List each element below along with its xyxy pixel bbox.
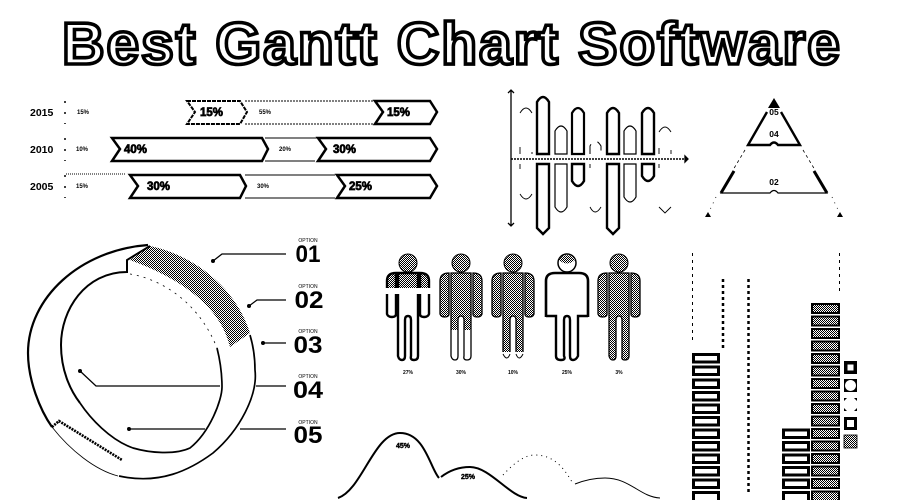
lower columns <box>520 164 671 234</box>
chart: people pictograms <box>384 254 640 376</box>
person percentages: 10% <box>508 370 519 376</box>
option 02: 02 <box>294 287 324 314</box>
pyramid third tier edges <box>733 150 815 170</box>
hill 1 <box>338 433 439 498</box>
chart: mirrored column chart <box>508 90 688 234</box>
outer ring <box>28 245 148 427</box>
small middle labels: 20% <box>279 147 292 153</box>
person percentages: 3% <box>615 370 623 376</box>
dithered top segment <box>130 246 250 347</box>
tier labels: 05 <box>769 107 779 117</box>
small middle labels <box>76 110 292 190</box>
pyramid footer edges <box>708 197 840 214</box>
inner ring <box>61 246 150 403</box>
legend squares <box>844 361 857 448</box>
column 2 <box>784 430 808 500</box>
lower dithered band <box>52 421 122 460</box>
hill 2 <box>441 467 527 498</box>
column 1 <box>694 354 718 500</box>
option 01: 01 <box>296 241 320 268</box>
chart: stacked bars <box>692 253 857 500</box>
chart: pyramid <box>705 98 843 217</box>
option 04: OPTION <box>298 374 318 380</box>
chart: ring segments <box>28 245 286 479</box>
person percentages: 27% <box>403 370 414 376</box>
row label: 2015: 2015 <box>30 107 54 119</box>
percentage labels: 15% <box>387 107 410 119</box>
leader dots <box>78 259 265 431</box>
hill labels: 45% <box>396 443 411 450</box>
pyramid second tier <box>748 112 800 145</box>
bar row: 2010 <box>65 138 437 161</box>
leader lines <box>80 254 286 429</box>
person 3 <box>492 254 534 360</box>
person 5 <box>598 254 640 360</box>
hill 3 <box>503 455 572 482</box>
option 04: 04 <box>293 377 324 404</box>
chart: yearly segmented bars <box>30 101 437 198</box>
option 05: OPTION <box>298 420 318 426</box>
tier labels: 04 <box>769 129 779 139</box>
person percentages: 25% <box>562 370 573 376</box>
row label: 2010: 2010 <box>30 144 54 156</box>
small middle labels: 30% <box>257 184 270 190</box>
option 05: 05 <box>294 422 322 449</box>
option 03: 03 <box>294 332 322 359</box>
small middle labels: 15% <box>76 184 89 190</box>
option 02: OPTION <box>298 284 318 290</box>
row label: 2005: 2005 <box>30 181 54 193</box>
bar row: 2005 <box>65 174 437 198</box>
percentage labels: 30% <box>147 181 170 193</box>
axes <box>508 90 688 226</box>
bar row: 2015 <box>65 101 437 124</box>
small middle labels: 10% <box>76 147 89 153</box>
hill labels <box>396 443 476 481</box>
pyramid base tier <box>721 171 827 193</box>
small middle labels: 15% <box>77 110 90 116</box>
legend: ring options <box>293 238 324 449</box>
person 1 <box>384 254 432 360</box>
percentage labels: 25% <box>349 181 372 193</box>
small middle labels: 55% <box>259 110 272 116</box>
person 4 <box>546 254 588 360</box>
percentage labels <box>124 107 410 193</box>
hill 4 <box>575 478 660 498</box>
percentage labels: 15% <box>200 107 223 119</box>
tier labels <box>769 107 779 187</box>
dashed guide lines <box>692 253 840 495</box>
hill labels: 25% <box>461 474 476 481</box>
percentage labels: 30% <box>333 144 356 156</box>
column 3 <box>812 304 839 500</box>
tier labels: 02 <box>769 177 779 187</box>
upper columns <box>520 97 671 154</box>
option 03: OPTION <box>298 329 318 335</box>
person 2 <box>440 254 482 360</box>
option 01: OPTION <box>298 238 318 244</box>
person percentages <box>403 370 623 376</box>
pyramid top tier <box>768 98 780 108</box>
chart: hills <box>338 433 660 498</box>
title: Best Gantt Chart Software <box>62 11 840 77</box>
person percentages: 30% <box>456 370 467 376</box>
percentage labels: 40% <box>124 144 147 156</box>
